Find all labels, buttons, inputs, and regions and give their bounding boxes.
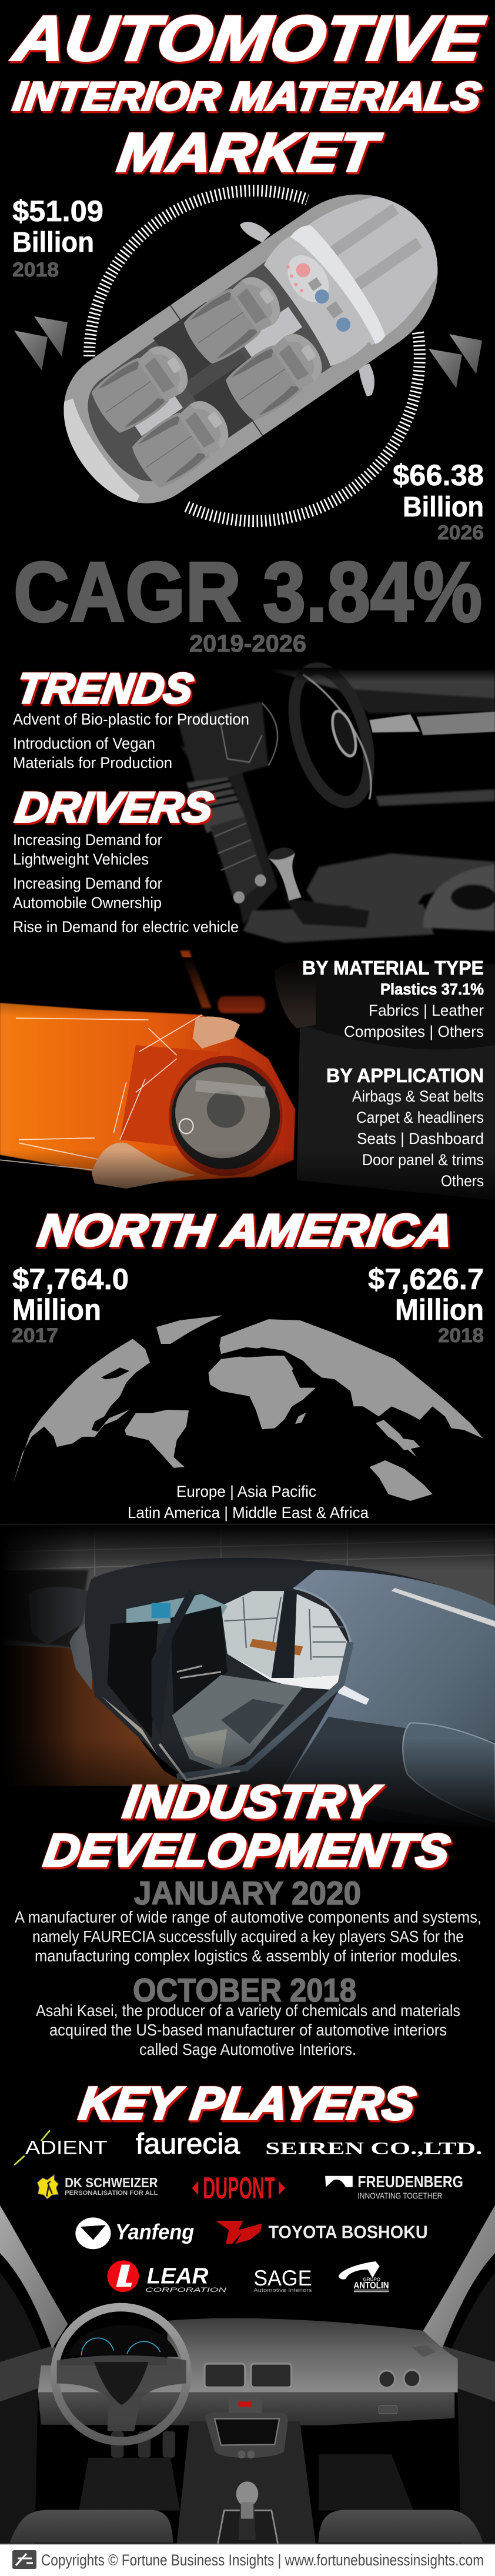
heading: industry developments: DEVELOPMENTS [41,1824,453,1876]
icon: fortune business insights logo [12,2550,36,2569]
logo: Yanfeng: Yanfeng [115,2220,194,2244]
value 2026: $66.38 [393,459,484,492]
footer [0,2544,495,2576]
headlights [359,167,404,187]
logo: Freudenberg: INNOVATING TOGETHER [357,2191,442,2201]
logo: Antolin: ANTOLIN [353,2281,389,2291]
value 2017: Million [12,1293,101,1326]
development: October 2018: Asahi Kasei, the producer of a variety of chemicals and materials [36,2001,460,2020]
logo: Faurecia: faurecia [136,2128,240,2160]
value 2018: 2018 [438,1324,484,1347]
logo: DK Schweizer [37,2174,158,2199]
value 2018: 2018 [12,259,59,281]
logo: Sage: SAGE [253,2265,312,2290]
instrument cluster [68,2325,178,2357]
heading: trends: TRENDS [14,665,196,712]
logo: Toyota Boshoku: TOYOTA BOSHOKU [268,2223,428,2243]
title: MARKET [114,121,384,183]
text: trends list: Advent of Bio-plastic for Production [13,710,249,728]
air vents [205,2364,420,2388]
pedals [111,2431,175,2458]
title: INTERIOR MATERIALS [11,74,484,119]
CAGR headline: 2019-2026 [189,630,306,657]
illustration: car dashboard [0,2205,495,2544]
development: October 2018: acquired the US-based manufacturer of automotive interiors [49,2021,447,2039]
segment: by material type: Fabrics | Leather [369,1002,484,1019]
logo: Adient [14,2130,108,2165]
cabin floor [88,261,334,481]
hood [308,196,437,345]
shop floor [0,1645,189,1786]
factory background [0,1525,495,1651]
development: October 2018: OCTOBER 2018 [133,1971,356,2008]
heading: drivers: DRIVERS [13,784,216,831]
segment: by application: Carpet & headliners [356,1109,484,1126]
pillars [0,2205,68,2349]
value 2018 [12,195,103,281]
tick ring around car [89,191,420,521]
logo: DK Schweizer: DK SCHWEIZER [65,2174,158,2190]
map inland seas [101,1347,303,1388]
photo: orange car headlight [0,950,495,1214]
rear bumper [63,399,140,502]
logo: Adient: ADIENT [25,2137,108,2158]
logo: Lear [108,2260,226,2294]
text: other regions [128,1483,369,1521]
text: other regions: Europe | Asia Pacific [176,1483,316,1500]
interior [108,1621,158,1738]
text: other regions: Latin America | Middle East & Africa [128,1504,369,1521]
segment: by application: Seats | Dashboard [357,1130,484,1147]
logo: Lear: LEAR [147,2263,208,2288]
segment: by application [326,1065,484,1190]
segment: by material type: BY MATERIAL TYPE [302,957,484,979]
car front [69,1621,95,1690]
steering wheel [55,2307,187,2441]
dash top [38,2318,458,2393]
value 2018: Million [395,1293,484,1326]
logo: Yanfeng [75,2217,194,2249]
value 2017: $7,764.0 [12,1263,129,1296]
seats [9,2510,173,2543]
development: January 2020: manufacturing complex logistics & assembly of interior modules. [35,1947,461,1965]
heading: industry developments: INDUSTRY [121,1776,384,1827]
heading: key players: KEY PLAYERS [76,2077,419,2129]
logo: Freudenberg: FREUDENBERG [357,2172,463,2191]
world map [14,1315,483,1501]
logo: DK Schweizer: PERSONALISATION FOR ALL [65,2190,158,2197]
development: October 2018 [36,1971,460,2058]
development: January 2020: JANUARY 2020 [134,1874,361,1911]
photo: car body on assembly line [0,1525,495,1834]
dashboard glass [264,236,369,366]
value 2018: $51.09 [12,195,103,228]
segment: by application: Others [441,1172,484,1190]
windows [221,1591,284,1678]
value 2017: 2017 [12,1324,58,1347]
logo: Seiren: SEIREN CO.,LTD. [265,2140,483,2158]
lower dash [38,2393,454,2425]
pillars and sills [272,1591,297,1678]
text: trends list: Materials for Production [13,754,172,772]
text: drivers list: Automobile Ownership [13,894,162,912]
photo: car cockpit [0,659,495,943]
illustration: car top view [63,194,437,503]
logo: DuPont: DUPONT [203,2171,275,2205]
logo: Freudenberg [325,2172,463,2201]
logo: DuPont [192,2171,285,2205]
logo: Toyota Boshoku [216,2221,428,2244]
car mirrors [240,222,374,396]
segment: by application: Door panel & trims [362,1151,484,1169]
title: AUTOMOTIVE [8,2,489,74]
icon: left arrows [14,316,68,371]
seats [183,277,280,363]
title [8,2,489,183]
door lines [170,304,263,437]
cockpit highlights [189,659,495,903]
text: drivers list: Rise in Demand for electric vehicle [13,918,239,936]
footwell [79,2458,180,2511]
value 2026: 2026 [437,522,484,544]
logo: Antolin [339,2261,389,2292]
segment: by material type: Plastics 37.1% [380,980,484,998]
development: January 2020 [15,1874,481,1965]
icon: right arrows [429,334,482,388]
rear quarter body [284,1570,495,1828]
logo: Sage: Automotive Interiors [253,2287,312,2293]
text: drivers list: Increasing Demand for [13,875,162,892]
heading: industry developments [41,1776,453,1876]
center tunnels [244,307,302,357]
segment: by material type: Composites | Others [344,1023,484,1040]
value 2018 [368,1263,484,1347]
value 2026: Billion [403,492,484,523]
heading: north america: NORTH AMERICA [35,1206,456,1256]
value 2017 [12,1263,129,1347]
value 2026 [393,459,484,544]
value 2018: Billion [12,227,94,258]
text: drivers list [13,831,239,936]
text: drivers list: Lightweight Vehicles [13,850,149,868]
dashboard dials [288,255,329,302]
segment: by material type [302,957,484,1040]
text: trends list: Introduction of Vegan [13,735,155,752]
segment: by application: BY APPLICATION [326,1065,484,1086]
logo: Lear: CORPORATION [145,2287,226,2294]
center console [177,2421,316,2544]
text: trends list [13,710,249,772]
logos [14,2128,483,2294]
segment: by application: Airbags & Seat belts [352,1087,484,1105]
text: drivers list: Increasing Demand for [13,831,162,849]
development: October 2018: called Sage Automotive Interiors. [139,2040,356,2058]
logo: Antolin: GRUPO [363,2277,380,2283]
door panels [0,2273,57,2544]
gear shift [218,2511,278,2544]
car body [63,194,437,503]
value 2018: $7,626.7 [368,1263,484,1296]
